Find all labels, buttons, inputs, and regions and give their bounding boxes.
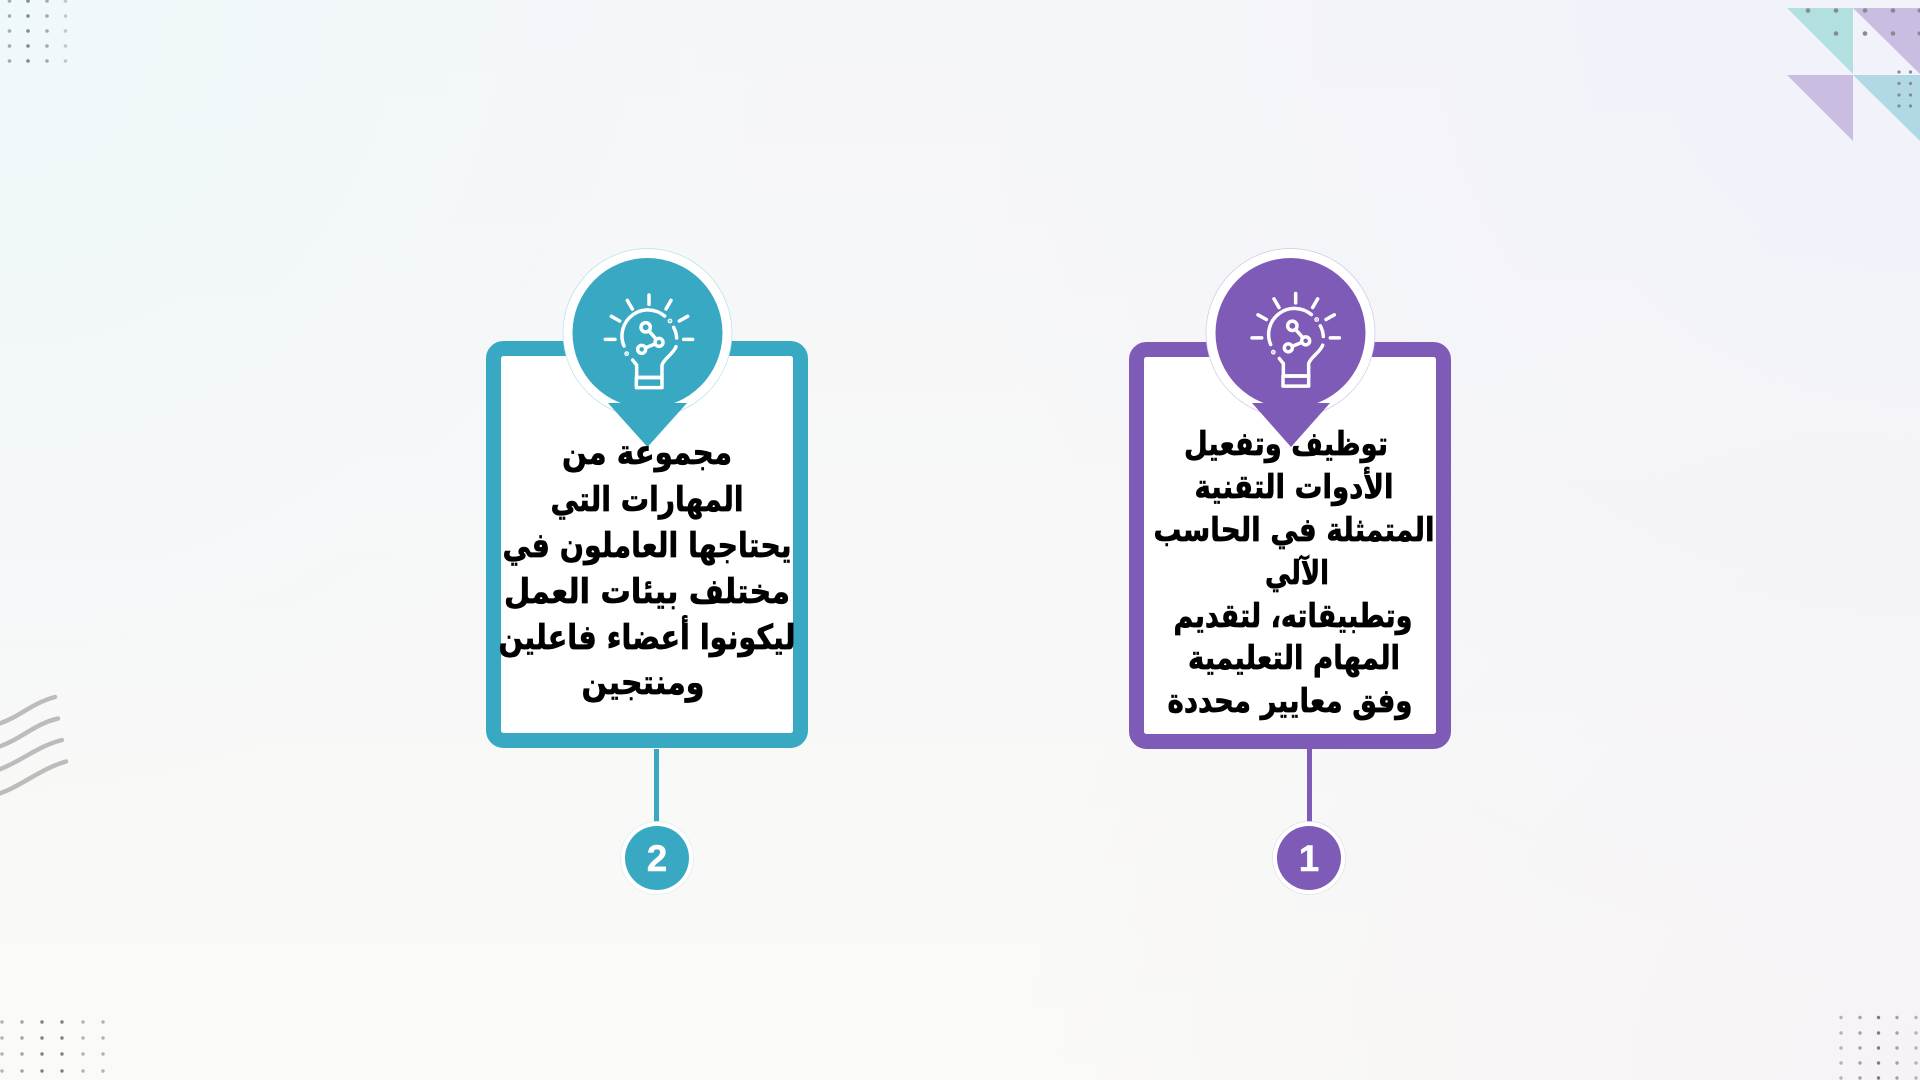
text: card 1: الآلي [1265,553,1329,592]
icon: light bulb [1252,293,1339,386]
text: card 2: ليكونوا أعضاء فاعلين [498,615,796,658]
card frame [494,348,800,740]
number badge 2: 2 [647,838,667,879]
waves: left [0,697,66,794]
connector line [654,749,659,827]
pin head [1216,258,1366,447]
dots: top left [8,0,67,63]
text: card 1: وفق معايير محددة [1168,681,1412,721]
text: card 1: المتمثلة في الحاسب [1154,510,1434,549]
text: card 2: مختلف بيئات العمل [504,572,790,612]
text: card 2: مجموعة من [562,433,732,473]
number badge 1 [1272,822,1346,894]
text: card 2: المهارات التي [550,480,744,520]
text: card 2: ومنتجين [582,663,704,703]
triangles: top right [1787,8,1920,141]
text: card 1: وتطبيقاته، لتقديم [1174,596,1412,636]
pin ring [563,248,732,418]
number badge 1: 1 [1299,838,1319,879]
dots: bottom left [0,1020,105,1073]
pin ring [1206,248,1375,418]
connector line [1307,749,1312,827]
card frame [1136,350,1444,742]
panel: card 2 (teal) [494,248,800,894]
text: card 1: المهام التعليمية [1188,638,1400,678]
number badge 2 [620,822,694,894]
dots: bottom right [1839,1016,1918,1080]
pin head [572,258,722,447]
text: card 1: الأدوات التقنية [1194,466,1394,507]
panel: card 1 (purple) [1136,248,1444,894]
text: card 1 [1154,424,1434,721]
text: card 1: توظيف وتفعيل [1184,424,1388,464]
text: card 2 [498,433,796,703]
text: card 2: يحتاجها العاملون في [502,526,792,566]
icon: light bulb [605,295,693,388]
